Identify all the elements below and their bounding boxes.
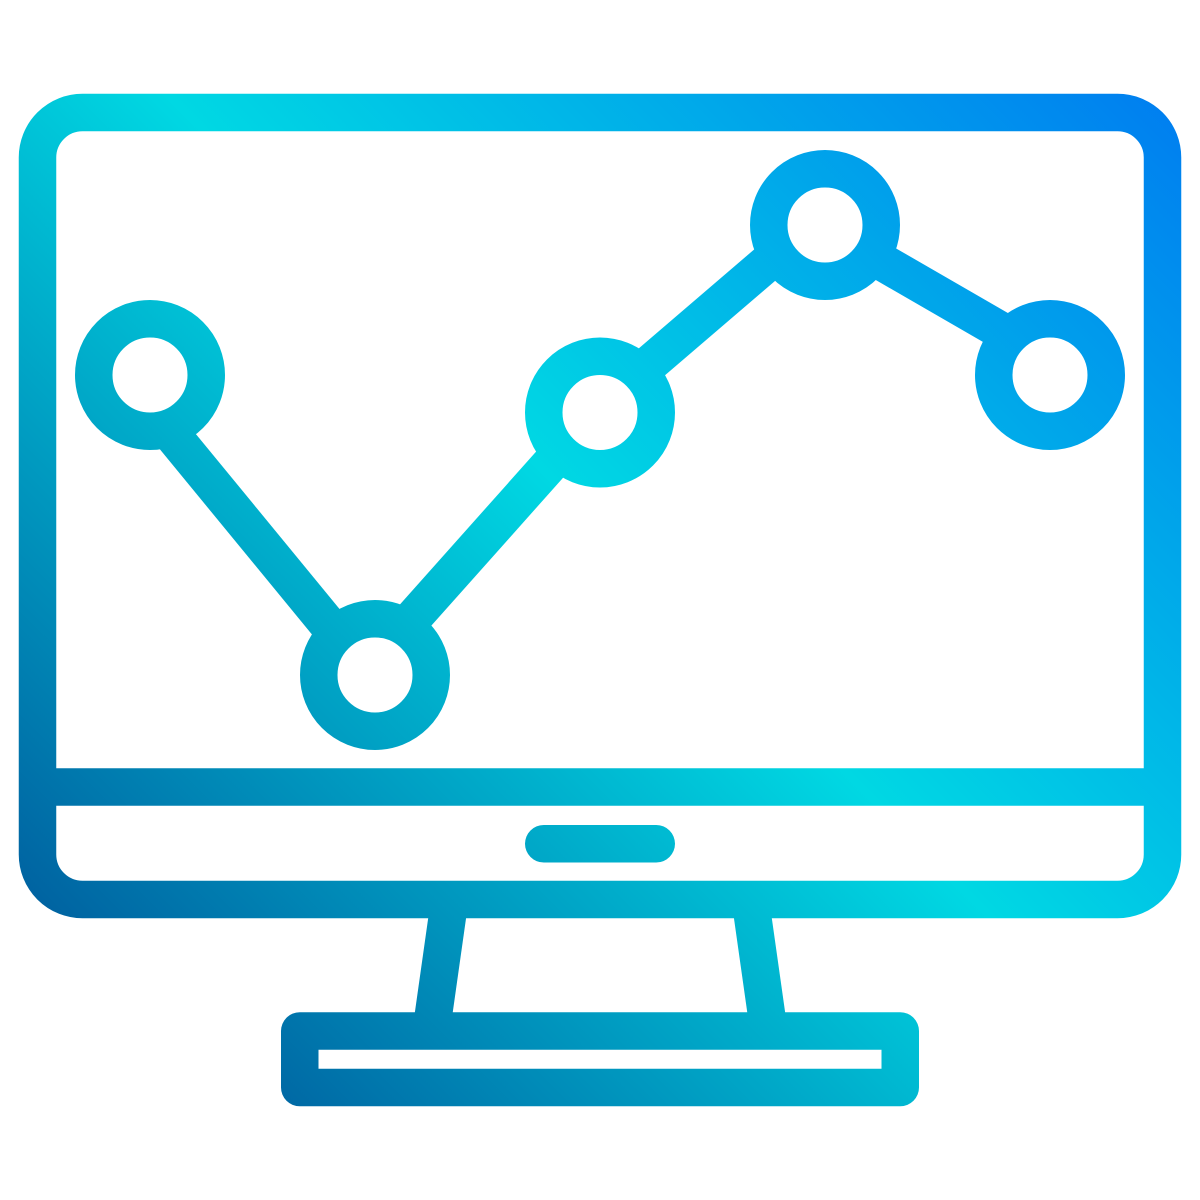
chart segment 2: [405, 453, 560, 627]
data point 4: [769, 169, 881, 281]
line chart: [94, 169, 1106, 731]
chart segment 1: [165, 426, 335, 633]
stand: [433, 912, 767, 1018]
monitor button: [525, 825, 675, 862]
chart segment 3: [640, 252, 780, 372]
stand right leg: [752, 912, 767, 1018]
data point 3: [544, 356, 656, 469]
data point 5: [994, 319, 1106, 431]
monitor body: [38, 112, 1162, 900]
stand left leg: [433, 912, 448, 1018]
screen bottom bezel line: [38, 768, 1162, 806]
data point 1: [94, 319, 206, 431]
chart segment 4: [870, 255, 1005, 333]
data point 2: [319, 619, 431, 731]
stand base: [300, 1031, 900, 1088]
